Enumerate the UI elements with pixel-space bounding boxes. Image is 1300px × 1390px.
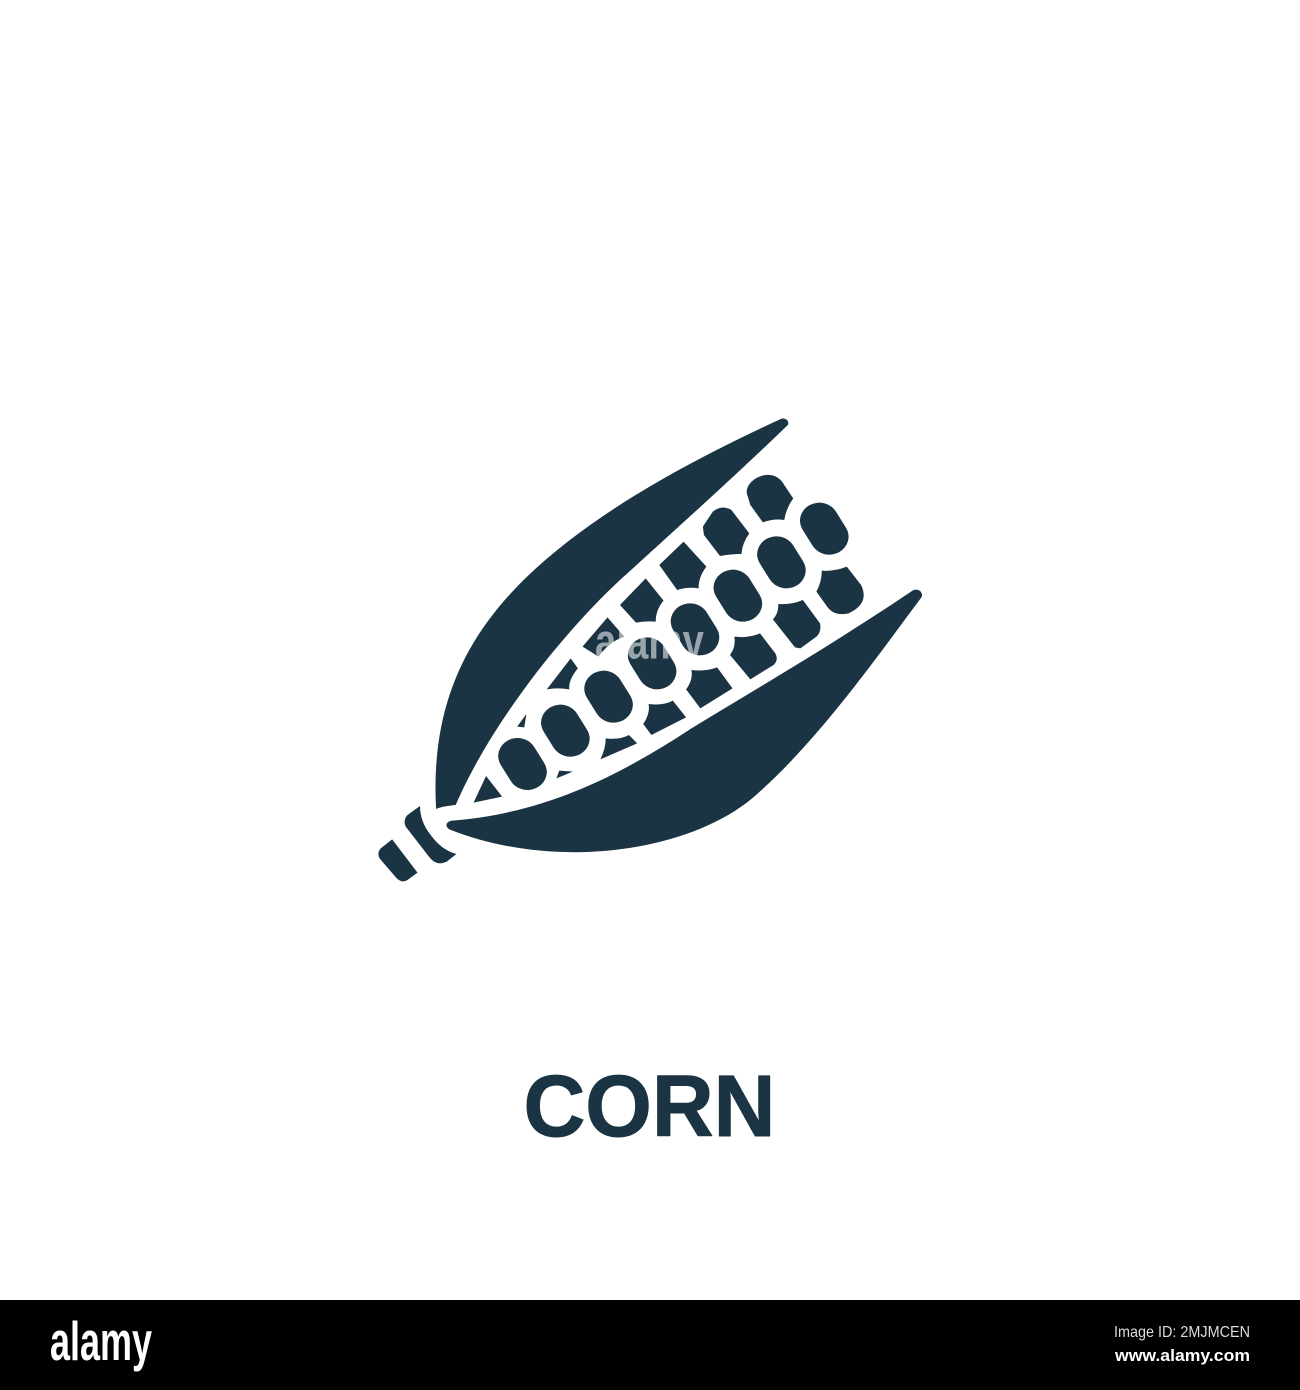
base ring	[405, 806, 456, 863]
back row kernels	[474, 475, 793, 803]
website: www.alamy.com	[1114, 1346, 1250, 1365]
watermark on icon: alamy	[595, 613, 704, 669]
upper husk leaf	[435, 419, 788, 809]
footer logo: alamy	[50, 1310, 152, 1372]
middle row rounded kernels	[517, 521, 829, 772]
title: CORN: CORN	[524, 1058, 776, 1155]
footer bar	[0, 1300, 1300, 1390]
image id: Image ID: 2MJMCEN	[1114, 1324, 1250, 1341]
stem end	[378, 839, 417, 881]
icon: corn cob	[378, 419, 922, 881]
lower husk leaf	[446, 590, 922, 852]
front row kernels	[556, 567, 864, 778]
